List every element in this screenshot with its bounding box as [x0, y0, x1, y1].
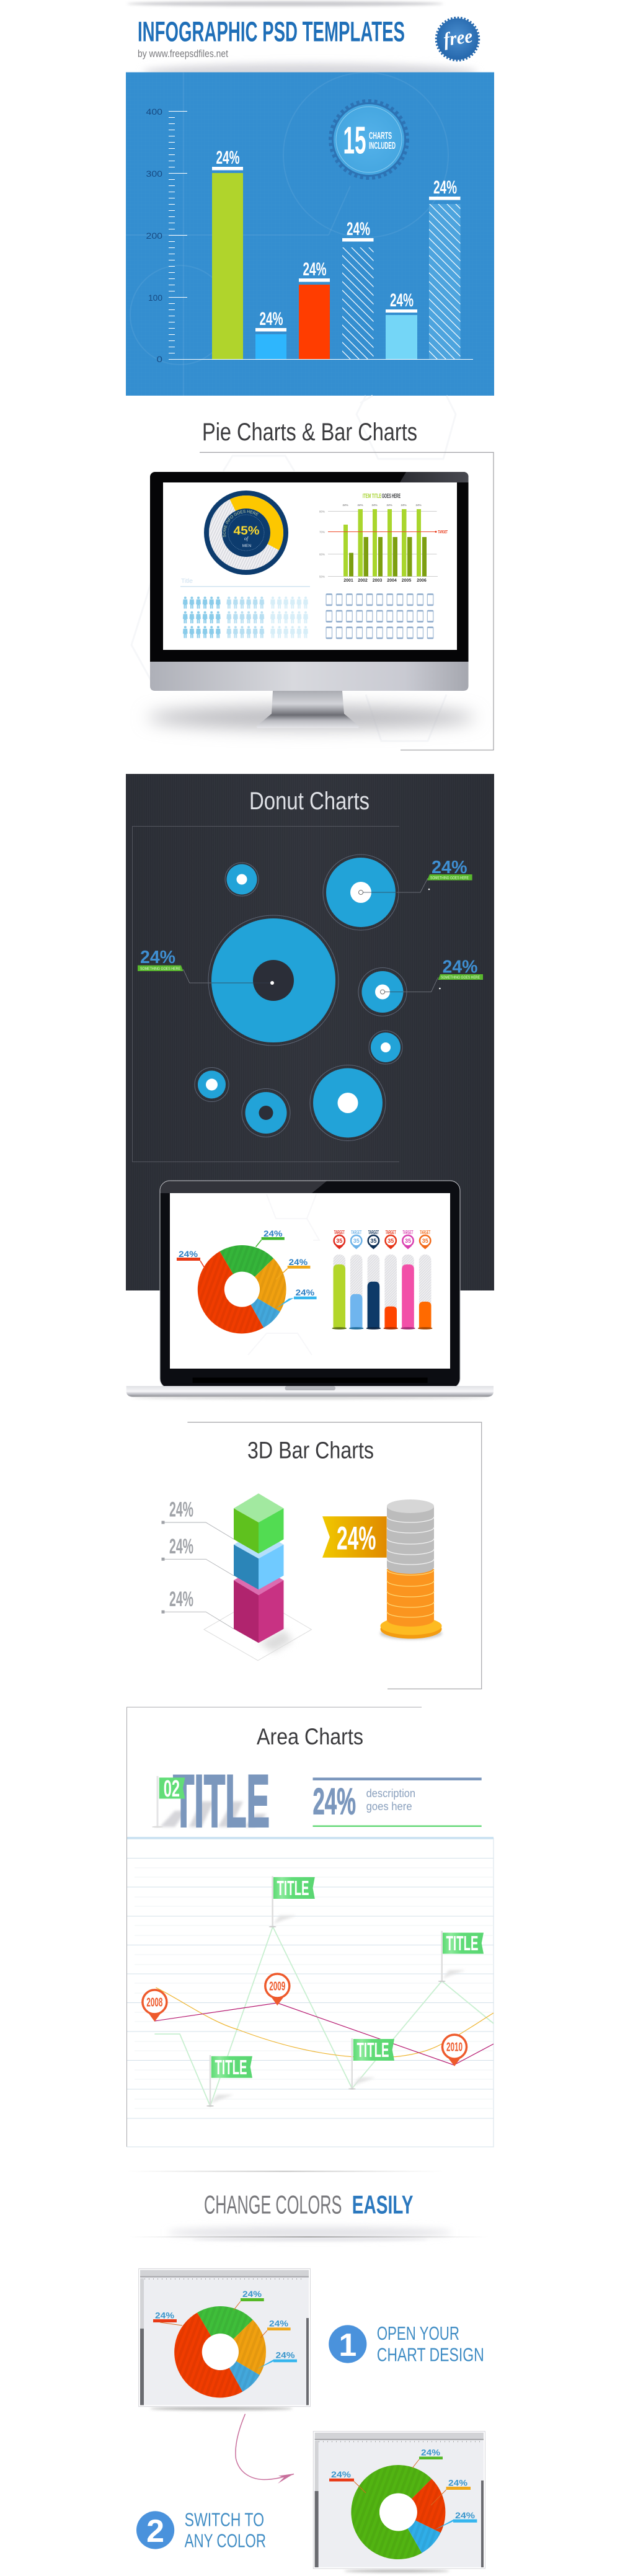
flag 3	[348, 2038, 394, 2090]
pin 4: 35	[388, 1238, 394, 1244]
block: green	[234, 1493, 284, 1553]
cylinder orange	[387, 1569, 434, 1627]
label blue: 24%	[296, 1287, 315, 1297]
pin 2009: 2009	[269, 1979, 285, 1993]
bar 4	[383, 1255, 398, 1330]
donut chart 45%: MEN	[242, 544, 252, 548]
block: magenta	[234, 1566, 284, 1643]
donut 1	[225, 863, 259, 896]
pin 3	[368, 1230, 379, 1249]
step 2	[136, 2508, 266, 2552]
grouped bar chart: 2001	[343, 579, 353, 583]
grouped bar chart: TARGET	[438, 530, 448, 535]
axis labels: 300	[146, 169, 162, 179]
labels after: 24%	[331, 2469, 352, 2479]
line: yellow	[156, 1988, 494, 2057]
label red: 24%	[179, 1249, 198, 1259]
icon: free badge	[436, 17, 479, 61]
big title with flag: 02	[164, 1776, 180, 1802]
section header: change colors easily: EASILY	[352, 2190, 413, 2219]
badge: 15 charts included: 15	[343, 119, 366, 162]
stat description: description	[366, 1787, 415, 1800]
stat description	[312, 1777, 482, 1827]
pin 1	[334, 1230, 345, 1249]
chart: cylinder with ribbon: 24%	[337, 1520, 376, 1557]
pin 3: 35	[370, 1238, 376, 1244]
callout left: SOMETHING GOES HERE	[140, 967, 180, 971]
heading: area charts: Area Charts	[257, 1724, 363, 1749]
laptop slot	[193, 1378, 428, 1383]
grouped bar chart: 80%	[319, 510, 325, 513]
donut 3 large	[208, 915, 339, 1046]
step 1: CHART DESIGN	[377, 2344, 484, 2365]
grouped bar chart: 24%	[342, 504, 348, 507]
monitor shadow	[147, 707, 476, 728]
label red	[177, 1249, 204, 1267]
labels after: 24%	[421, 2447, 441, 2457]
pin 2009	[265, 1974, 290, 2005]
pin 2008	[143, 1990, 167, 2022]
label orange	[276, 1257, 310, 1279]
pin 6	[420, 1230, 430, 1249]
flag 1: TITLE	[277, 1876, 309, 1899]
donut 4	[358, 967, 407, 1016]
pin 2010	[443, 2035, 466, 2066]
labels and leaders: 24%	[169, 1588, 193, 1611]
badge: 15 charts included: INCLUDED	[369, 141, 396, 151]
grouped bar chart: GOES HERE	[382, 493, 401, 500]
label orange: 24%	[289, 1257, 308, 1267]
grouped bar chart: 24%	[357, 504, 363, 507]
line: green area	[154, 1927, 494, 2106]
flag 2: TITLE	[215, 2056, 247, 2079]
bar: blue: 24%	[259, 309, 283, 329]
callout right: 24%	[443, 957, 478, 977]
heading: pie charts and bar charts: Pie Charts & Bar Charts	[202, 419, 417, 446]
big title with flag	[152, 1760, 270, 1843]
pin 6: 35	[422, 1238, 428, 1244]
laptop screen	[170, 1193, 450, 1369]
decorative hexagons	[131, 396, 456, 741]
labels and leaders: 24%	[169, 1535, 193, 1558]
callout top right: 24%	[432, 858, 467, 877]
labels before: 24%	[275, 2350, 295, 2360]
step 1: 1	[339, 2327, 356, 2363]
panel: dark donut charts	[126, 774, 494, 1290]
step 1	[329, 2322, 484, 2365]
flag 4	[438, 1931, 484, 1982]
labels after: 24%	[455, 2510, 476, 2520]
flag 3: TITLE	[357, 2038, 389, 2061]
leader lines	[184, 878, 438, 992]
label green: 24%	[264, 1228, 283, 1238]
pin 4: TARGET	[386, 1230, 396, 1235]
donut chart 45%: 45%	[233, 525, 260, 538]
pictogram: people mid	[226, 597, 265, 641]
labels and leaders: 24%	[169, 1498, 193, 1522]
label green	[256, 1228, 285, 1247]
callout right	[438, 957, 483, 989]
grouped bar chart: 24%	[401, 504, 407, 507]
panel: area charts frame	[126, 1707, 494, 2147]
bar 6	[418, 1255, 433, 1330]
cylinder grey	[387, 1506, 434, 1574]
grouped bar chart: 70%	[319, 531, 325, 533]
pin 1: 35	[336, 1238, 342, 1244]
stat description: goes here	[366, 1800, 412, 1813]
stat description: 24%	[312, 1781, 356, 1822]
grouped bar chart	[319, 493, 448, 583]
pin 5: TARGET	[403, 1230, 414, 1235]
axis ticks	[169, 112, 473, 360]
labels after: 24%	[448, 2478, 468, 2488]
pin 2: 35	[353, 1238, 360, 1244]
donut 5	[369, 1031, 402, 1064]
axis labels: 100	[148, 293, 162, 303]
pin 2010: 2010	[446, 2040, 463, 2054]
cylinder base	[380, 1627, 442, 1640]
grouped bar chart: 50%	[319, 575, 325, 578]
labels before: 24%	[242, 2289, 262, 2299]
step 2: ANY COLOR	[185, 2530, 266, 2552]
donut chart 45%: SOME INFO GOES HERE	[223, 510, 259, 537]
screenshot 2	[313, 2432, 485, 2572]
grouped bar chart: 24%	[415, 504, 422, 507]
laptop base	[126, 1386, 494, 1397]
grouped bar chart: 24%	[386, 504, 392, 507]
icon: free badge: free	[442, 25, 474, 50]
donut chart 45%	[204, 491, 288, 575]
callout left	[138, 948, 184, 971]
grouped bar chart: 24%	[371, 504, 378, 507]
bar 2	[349, 1255, 363, 1330]
badge: 15 charts included	[330, 101, 407, 178]
monitor stand	[257, 691, 359, 728]
chart grid	[127, 1858, 494, 2118]
grouped bar chart: 2005	[402, 579, 411, 583]
chart: cylinder with ribbon	[322, 1499, 442, 1640]
heading: 3d bar charts: 3D Bar Charts	[247, 1438, 374, 1464]
callout left: 24%	[140, 948, 175, 967]
monitor bezel	[150, 472, 469, 670]
pin 5: 35	[405, 1238, 411, 1244]
callout top right	[427, 858, 472, 890]
axis labels: 200	[146, 231, 162, 241]
flag 2	[206, 2055, 252, 2107]
bracket frame	[200, 453, 494, 750]
panel: blue bar chart	[126, 72, 494, 396]
monitor	[146, 472, 476, 738]
bar: hatched: 24%	[347, 219, 370, 239]
target pins	[334, 1230, 430, 1249]
arrow	[236, 2414, 294, 2484]
step 1: OPEN YOUR	[377, 2322, 459, 2344]
labels and leaders	[161, 1498, 234, 1629]
heading: donut charts: Donut Charts	[249, 788, 370, 815]
grouped bar chart: 60%	[319, 553, 325, 556]
pin 2	[351, 1230, 361, 1249]
donut 6	[310, 1065, 386, 1141]
donut 8	[242, 1089, 290, 1137]
title: INFOGRAPHIC PSD TEMPLATES	[138, 16, 405, 47]
bar 3	[366, 1255, 381, 1330]
pin 6: TARGET	[420, 1230, 430, 1235]
pictogram: people light	[270, 597, 309, 641]
chart: isometric stacked bar	[161, 1493, 311, 1661]
labels after	[331, 2447, 476, 2520]
callout top right: SOMETHING GOES HERE	[430, 877, 469, 881]
donut 2	[323, 855, 399, 930]
frame lines	[133, 826, 399, 1162]
step 2: 2	[146, 2513, 164, 2549]
grouped bar chart: ITEM TITLE	[363, 493, 381, 500]
flag 1	[269, 1876, 315, 1927]
grouped bar chart: 2004	[387, 579, 397, 583]
donut chart in laptop	[198, 1245, 286, 1333]
pictogram: phones	[324, 593, 436, 643]
pictogram: people dark	[182, 597, 221, 641]
bar: light blue	[386, 290, 417, 359]
pictogram title: Title	[181, 578, 193, 585]
donut before	[174, 2306, 266, 2397]
callout right: SOMETHING GOES HERE	[441, 976, 480, 980]
bar: blue	[255, 309, 286, 359]
pin 2: TARGET	[351, 1230, 361, 1235]
screenshot 1	[139, 2268, 310, 2410]
bar: light blue: 24%	[390, 290, 414, 311]
axis labels	[146, 107, 162, 364]
bar: green: 24%	[216, 148, 239, 168]
axis labels: 400	[146, 107, 162, 117]
monitor screen	[163, 482, 457, 650]
ribbon	[322, 1516, 387, 1558]
grouped bar chart: 2006	[417, 579, 427, 583]
bar 5	[401, 1255, 415, 1330]
monitor chin	[150, 662, 469, 691]
axis labels: 0	[156, 354, 162, 364]
progress bars	[332, 1255, 433, 1330]
pin 2008: 2008	[146, 1996, 162, 2009]
grouped bar chart: 2003	[373, 579, 382, 583]
bar: red: 24%	[303, 259, 326, 280]
pin 3: TARGET	[368, 1230, 379, 1235]
section header: change colors easily	[127, 2170, 489, 2241]
badge: 15 charts included: CHARTS	[369, 131, 392, 141]
pin 1: TARGET	[334, 1230, 345, 1235]
panel: area charts frame: TITLE	[173, 1760, 270, 1843]
bar 1	[332, 1255, 347, 1330]
bar: green	[212, 148, 243, 359]
laptop lid	[160, 1181, 460, 1388]
donut chart 45%: of	[244, 536, 249, 541]
grouped bar chart: 2002	[358, 579, 368, 583]
donut 7	[195, 1068, 229, 1101]
pin 5	[402, 1230, 414, 1249]
label blue	[276, 1287, 317, 1308]
bar: red	[299, 259, 330, 359]
bar: hatched light	[429, 177, 460, 359]
section header: change colors easily: CHANGE COLORS	[204, 2190, 342, 2219]
subtitle: by www.freepsdfiles.net	[138, 48, 228, 60]
donut after	[351, 2465, 445, 2559]
bar: hatched	[342, 219, 373, 359]
flag 4: TITLE	[446, 1932, 479, 1955]
labels before: 24%	[269, 2318, 289, 2328]
bracket frame 3d	[187, 1423, 482, 1689]
labels before: 24%	[155, 2311, 175, 2321]
labels before	[155, 2289, 295, 2360]
pin 4	[386, 1230, 396, 1249]
laptop	[126, 1181, 494, 1399]
step 2: SWITCH TO	[185, 2508, 264, 2530]
header shadow	[127, 1, 477, 81]
line: magenta	[154, 2003, 494, 2065]
block: blue	[234, 1530, 284, 1589]
bar: hatched light: 24%	[433, 177, 457, 198]
base plate	[204, 1598, 311, 1661]
